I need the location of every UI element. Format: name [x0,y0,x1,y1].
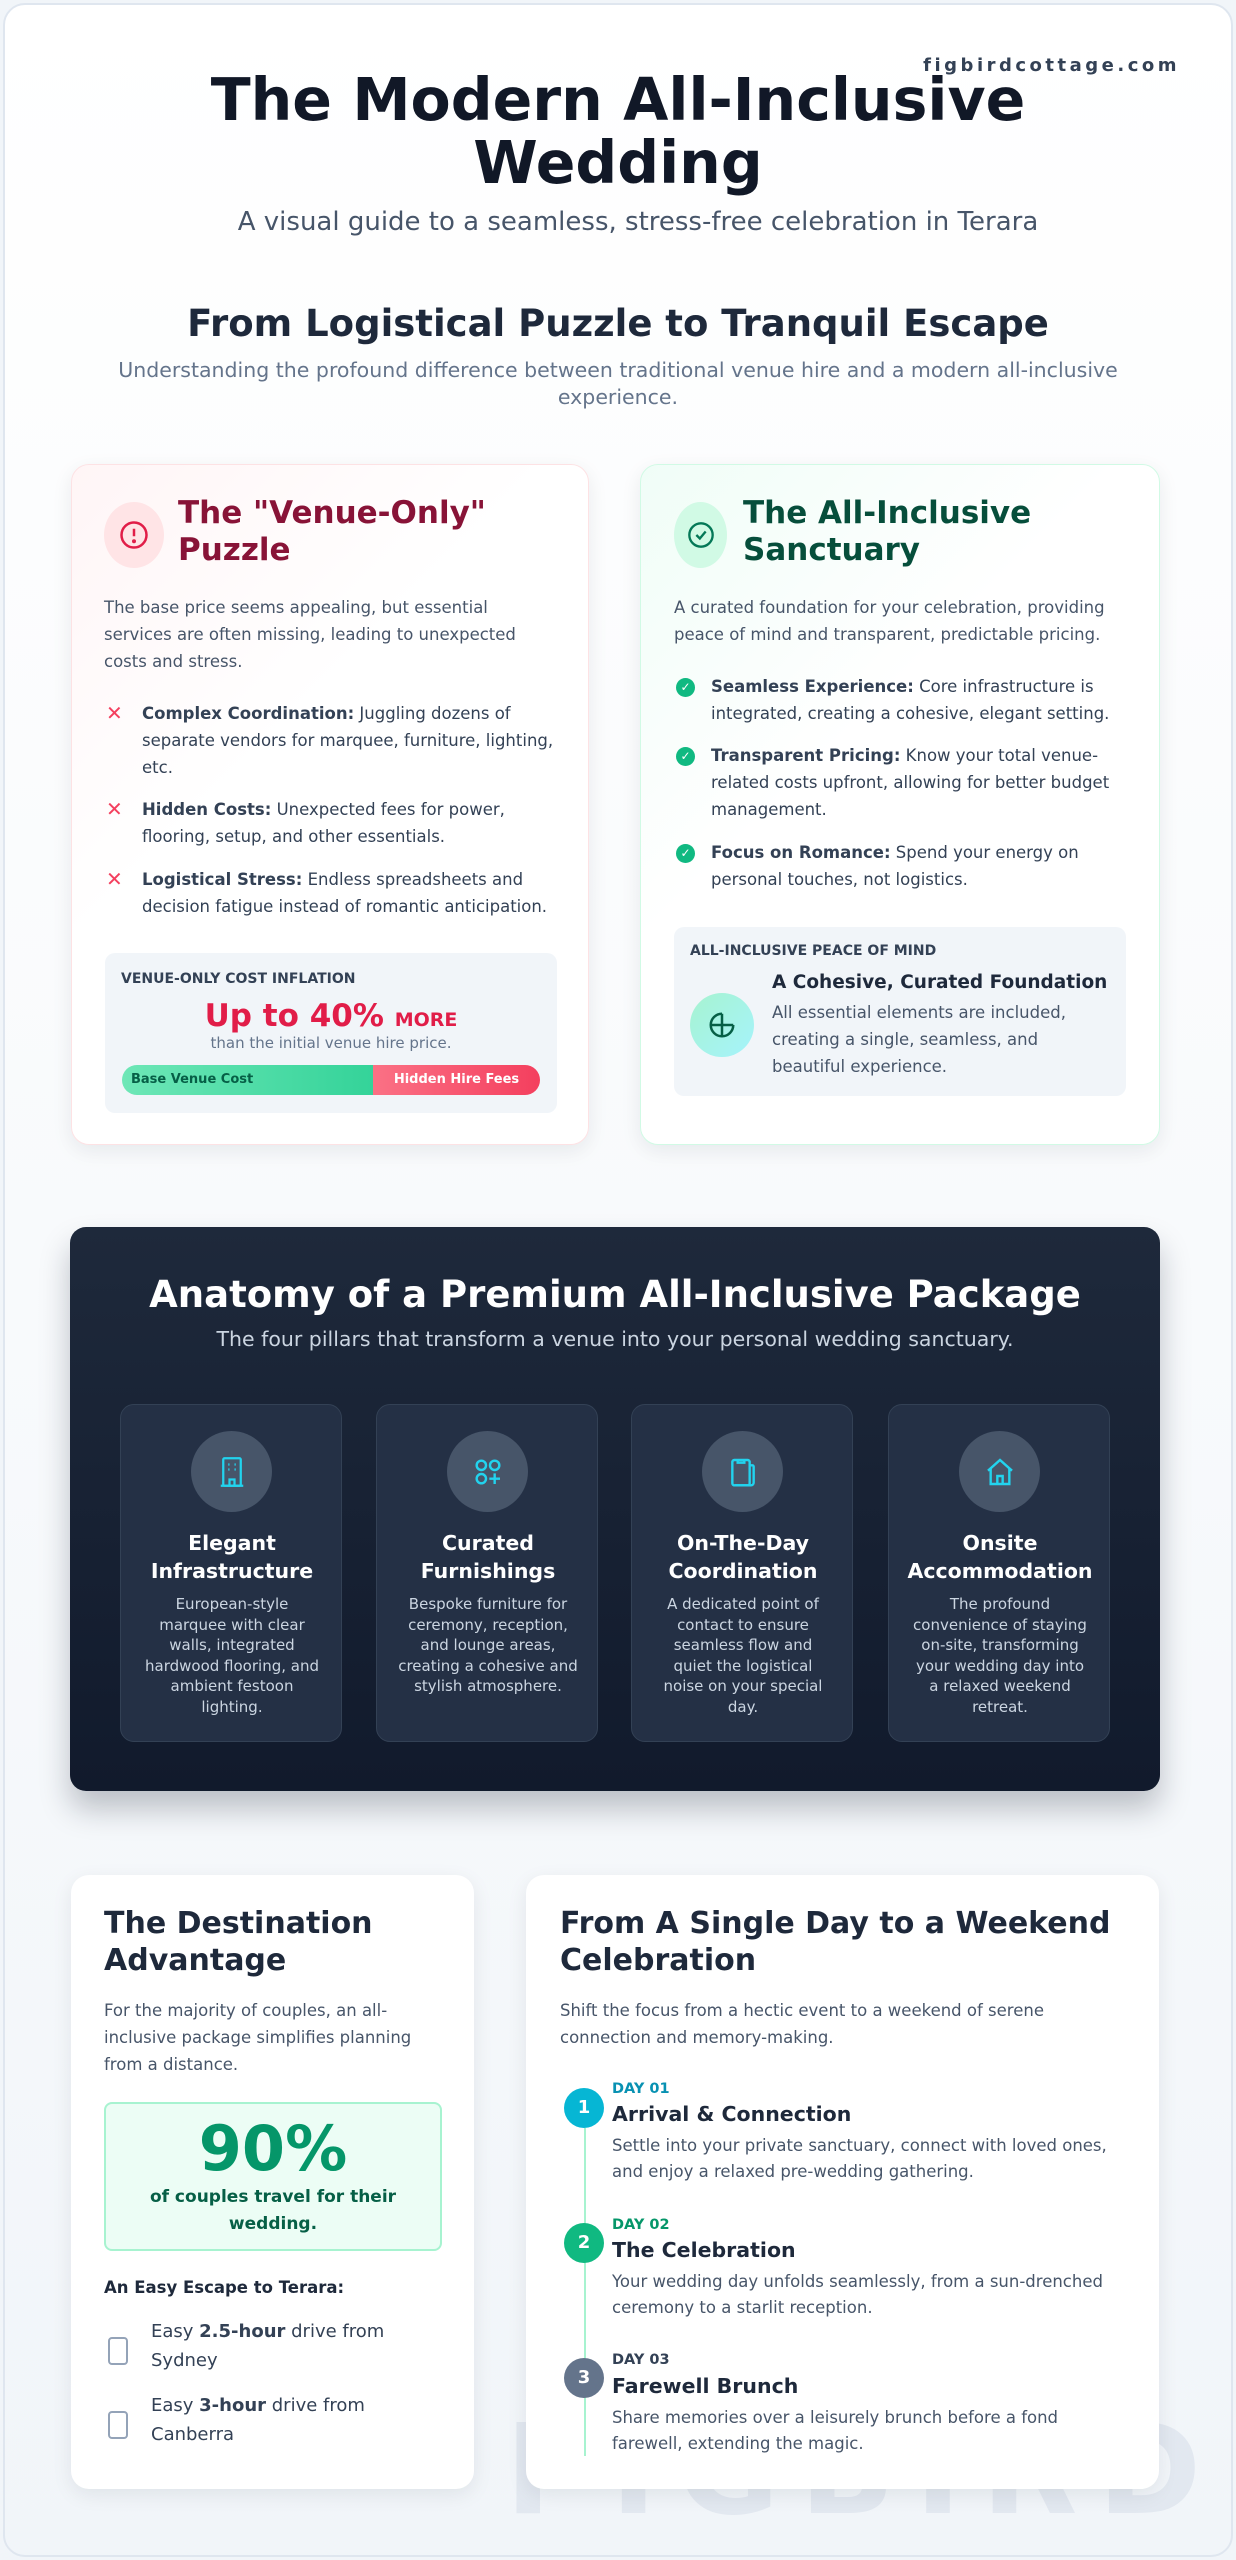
pillar: infrastructure [120,1404,342,1742]
day 1: DAY 01 [612,2081,670,2097]
day 1: 1 [578,2097,590,2118]
bullet list: ✕ [106,701,123,725]
bar [122,1065,540,1095]
description: For the majority of couples, an all-inclusive package simplifies planning from a distance. [104,2001,411,2074]
heading [743,495,1031,568]
escape heading: An Easy Escape to Terara: [104,2278,344,2297]
pillar: infrastructure: European-style marquee with clear walls, integrated hardwood flooring, and ambient festoon lighting. [145,1595,319,1716]
day 2: Your wedding day unfolds seamlessly, from a sun-drenched ceremony to a starlit reception. [612,2272,1103,2317]
icon: building [191,1431,272,1512]
checklist [676,677,1109,889]
panel: all-inclusive [640,464,1160,1145]
icon: check [674,502,727,568]
day 3: Share memories over a leisurely brunch before a fond farewell, extending the magic. [612,2408,1058,2453]
day 3: DAY 03 [612,2352,670,2368]
heading: The Destination [104,1906,373,1941]
heading [560,1906,1110,1978]
stat: 90%: 90% [199,2112,347,2185]
section heading: From Logistical Puzzle to Tranquil Escape [187,302,1049,345]
panel: weekend timeline [526,1875,1159,2489]
checklist: Seamless Experience: Core infrastructure is integrated, creating a cohesive, elegant setting. [711,677,1109,723]
day 3 [564,2352,1058,2453]
bar: Base Venue Cost [131,1072,253,1087]
heading [178,495,486,568]
pillar: furnishings: Furnishings [421,1559,555,1583]
day 1: Arrival & Connection [612,2102,851,2126]
pillar: accommodation: Accommodation [907,1559,1093,1583]
icon: grid plus [447,1431,528,1512]
bullet list: ✕ [106,797,123,821]
checklist: Focus on Romance: Spend your energy on personal touches, not logistics. [711,843,1079,889]
checklist: ✓ [680,680,691,694]
drive: sydney: Easy 2.5-hour drive from Sydney [151,2321,384,2371]
day 3: 3 [578,2367,590,2388]
icon: phone [108,2411,128,2439]
title: The Modern All-Inclusive [211,66,1025,134]
section subtext: Understanding the profound difference between traditional venue hire and a modern all-inclusive experience. [118,358,1118,409]
day 2 [564,2217,1103,2317]
pillar: coordination: On-The-Day [677,1531,809,1555]
cost inflation box: VENUE-ONLY COST INFLATION [121,971,355,987]
heading: Puzzle [178,532,291,568]
heading: The "Venue-Only" [178,495,486,531]
day 1: Settle into your private sanctuary, connect with loved ones, and enjoy a relaxed pre-wedding gathering. [612,2136,1107,2181]
heading: From A Single Day to a Weekend [560,1906,1110,1941]
pillar: coordination: A dedicated point of contact to ensure seamless flow and quiet the logistical noise on your special day. [664,1595,822,1716]
icon: house [959,1431,1040,1512]
icon: pie [690,993,754,1057]
heading: Sanctuary [743,532,920,568]
cost inflation box: than the initial venue hire price. [210,1034,451,1052]
brand: figbirdcottage.com [923,55,1180,76]
checklist: ✓ [680,846,691,860]
heading [104,1906,373,1978]
peace of mind box: ALL-INCLUSIVE PEACE OF MIND [690,943,936,959]
subtitle: The four pillars that transform a venue into your personal wedding sanctuary. [216,1327,1014,1351]
cost inflation box: Up to 40% MORE [205,998,457,1034]
day 1 [564,2081,1107,2181]
title: Wedding [473,129,763,197]
bullet list: ✕ [106,867,123,891]
day 3: Farewell Brunch [612,2374,798,2398]
heading: Celebration [560,1943,756,1978]
pillar: coordination [631,1404,853,1742]
checklist: ✓ [680,749,691,763]
peace of mind box [674,927,1126,1096]
stat: 90% [104,2102,442,2251]
drive: canberra: Easy 3-hour drive from Canberra [151,2395,365,2445]
checklist: Transparent Pricing: Know your total venue-related costs upfront, allowing for better budget management. [711,746,1109,819]
pillar: furnishings [376,1404,598,1742]
pillar: furnishings: Curated [442,1531,534,1555]
pillar: coordination: Coordination [669,1559,817,1583]
description: A curated foundation for your celebration, providing peace of mind and transparent, predictable pricing. [674,598,1105,644]
day 2: DAY 02 [612,2217,670,2233]
pillar: accommodation [888,1404,1110,1742]
bullet list [106,701,553,916]
heading: Advantage [104,1943,286,1978]
pillar: furnishings: Bespoke furniture for ceremony, reception, and lounge areas, creating a cohesive and stylish atmosphere. [398,1595,578,1695]
icon: alert [104,502,164,568]
pillar: infrastructure: Infrastructure [151,1559,313,1583]
stat: 90%: of couples travel for their wedding. [150,2187,396,2234]
panel: anatomy [70,1227,1160,1791]
panel: destination advantage [71,1875,474,2489]
peace of mind box: A Cohesive, Curated Foundation [772,972,1107,993]
pillar: infrastructure: Elegant [188,1531,276,1555]
subtitle: A visual guide to a seamless, stress-free celebration in Terara [238,207,1038,237]
cost inflation box [105,953,557,1113]
timeline line [584,2128,586,2456]
panel: venue-only [71,464,589,1145]
bullet list: Logistical Stress: Endless spreadsheets and decision fatigue instead of romantic anticipation. [142,870,547,916]
icon: clipboard [702,1431,783,1512]
description: Shift the focus from a hectic event to a weekend of serene connection and memory-making. [560,2001,1044,2047]
heading: Anatomy of a Premium All-Inclusive Package [149,1273,1081,1316]
bar: Hidden Hire Fees [394,1072,519,1087]
bullet list: Complex Coordination: Juggling dozens of separate vendors for marquee, furniture, lighting, etc. [142,704,553,777]
day 2: 2 [578,2232,590,2253]
pillar: accommodation: The profound convenience of staying on-site, transforming your wedding day into a relaxed weekend retreat. [913,1595,1087,1716]
pillar: accommodation: Onsite [963,1531,1037,1555]
description: The base price seems appealing, but essential services are often missing, leading to unexpected costs and stress. [104,598,516,671]
heading: The All-Inclusive [743,495,1031,531]
watermark: FIGBIRD [505,2398,1221,2543]
day 2: The Celebration [612,2238,796,2262]
title [211,66,1025,197]
icon: phone [108,2337,128,2365]
bullet list: Hidden Costs: Unexpected fees for power, flooring, setup, and other essentials. [142,800,505,846]
peace of mind box: All essential elements are included, creating a single, seamless, and beautiful experience. [772,1003,1066,1076]
